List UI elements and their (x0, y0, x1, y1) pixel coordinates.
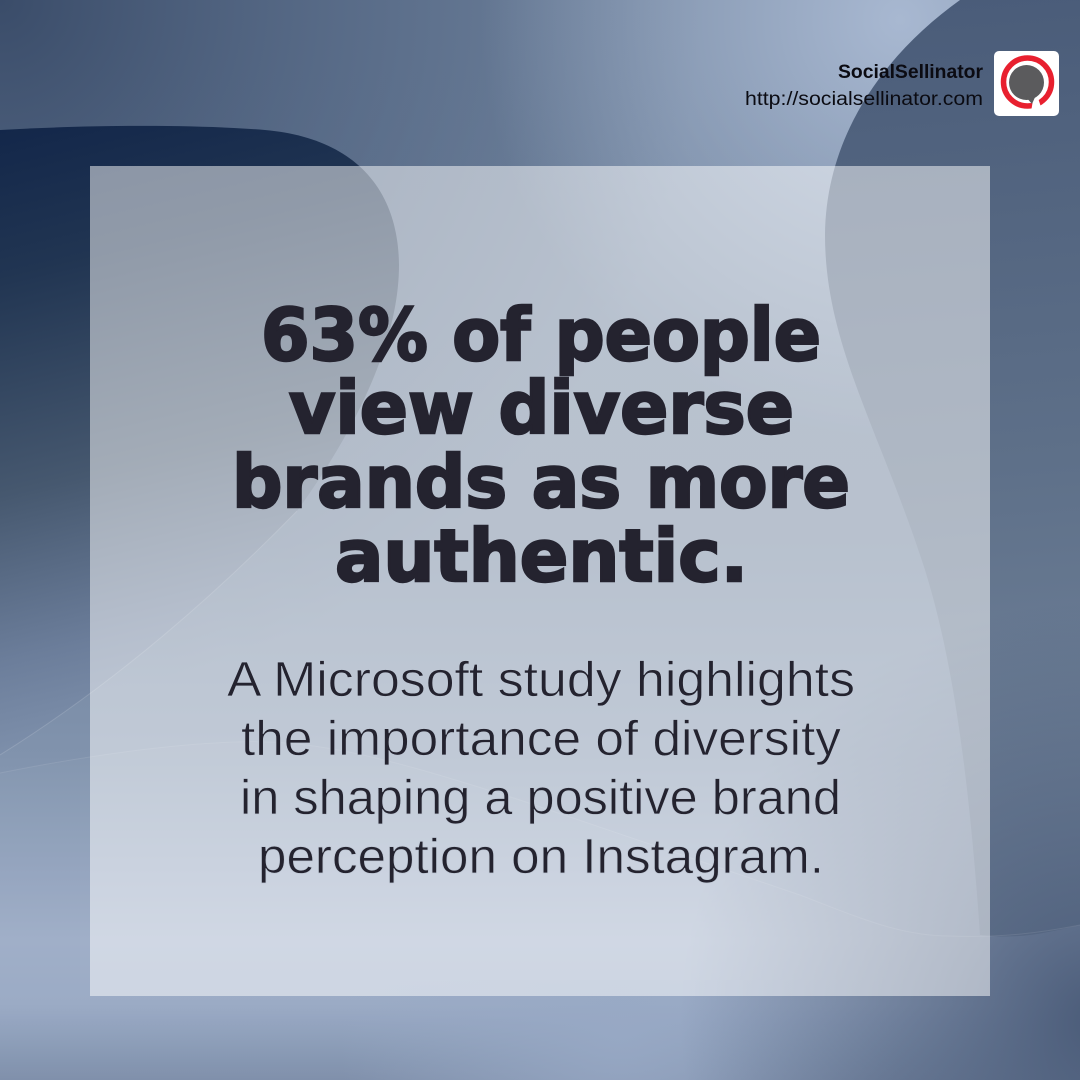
body text: the importance of diversity (241, 712, 842, 766)
body text: perception on Instagram. (258, 830, 824, 884)
heading: 63% of people (261, 293, 821, 377)
heading: brands as more (232, 440, 850, 524)
body text: A Microsoft study highlights (227, 653, 855, 707)
heading: authentic. (335, 514, 748, 598)
panel: translucent card (90, 166, 990, 996)
brand url: http://socialsellinator.com (745, 89, 983, 110)
body text: in shaping a positive brand (240, 771, 841, 825)
brand name: SocialSellinator (838, 62, 984, 83)
icon: SocialSellinator logo (994, 51, 1059, 116)
heading: view diverse (289, 366, 794, 450)
body text (227, 653, 855, 884)
heading (232, 293, 850, 598)
